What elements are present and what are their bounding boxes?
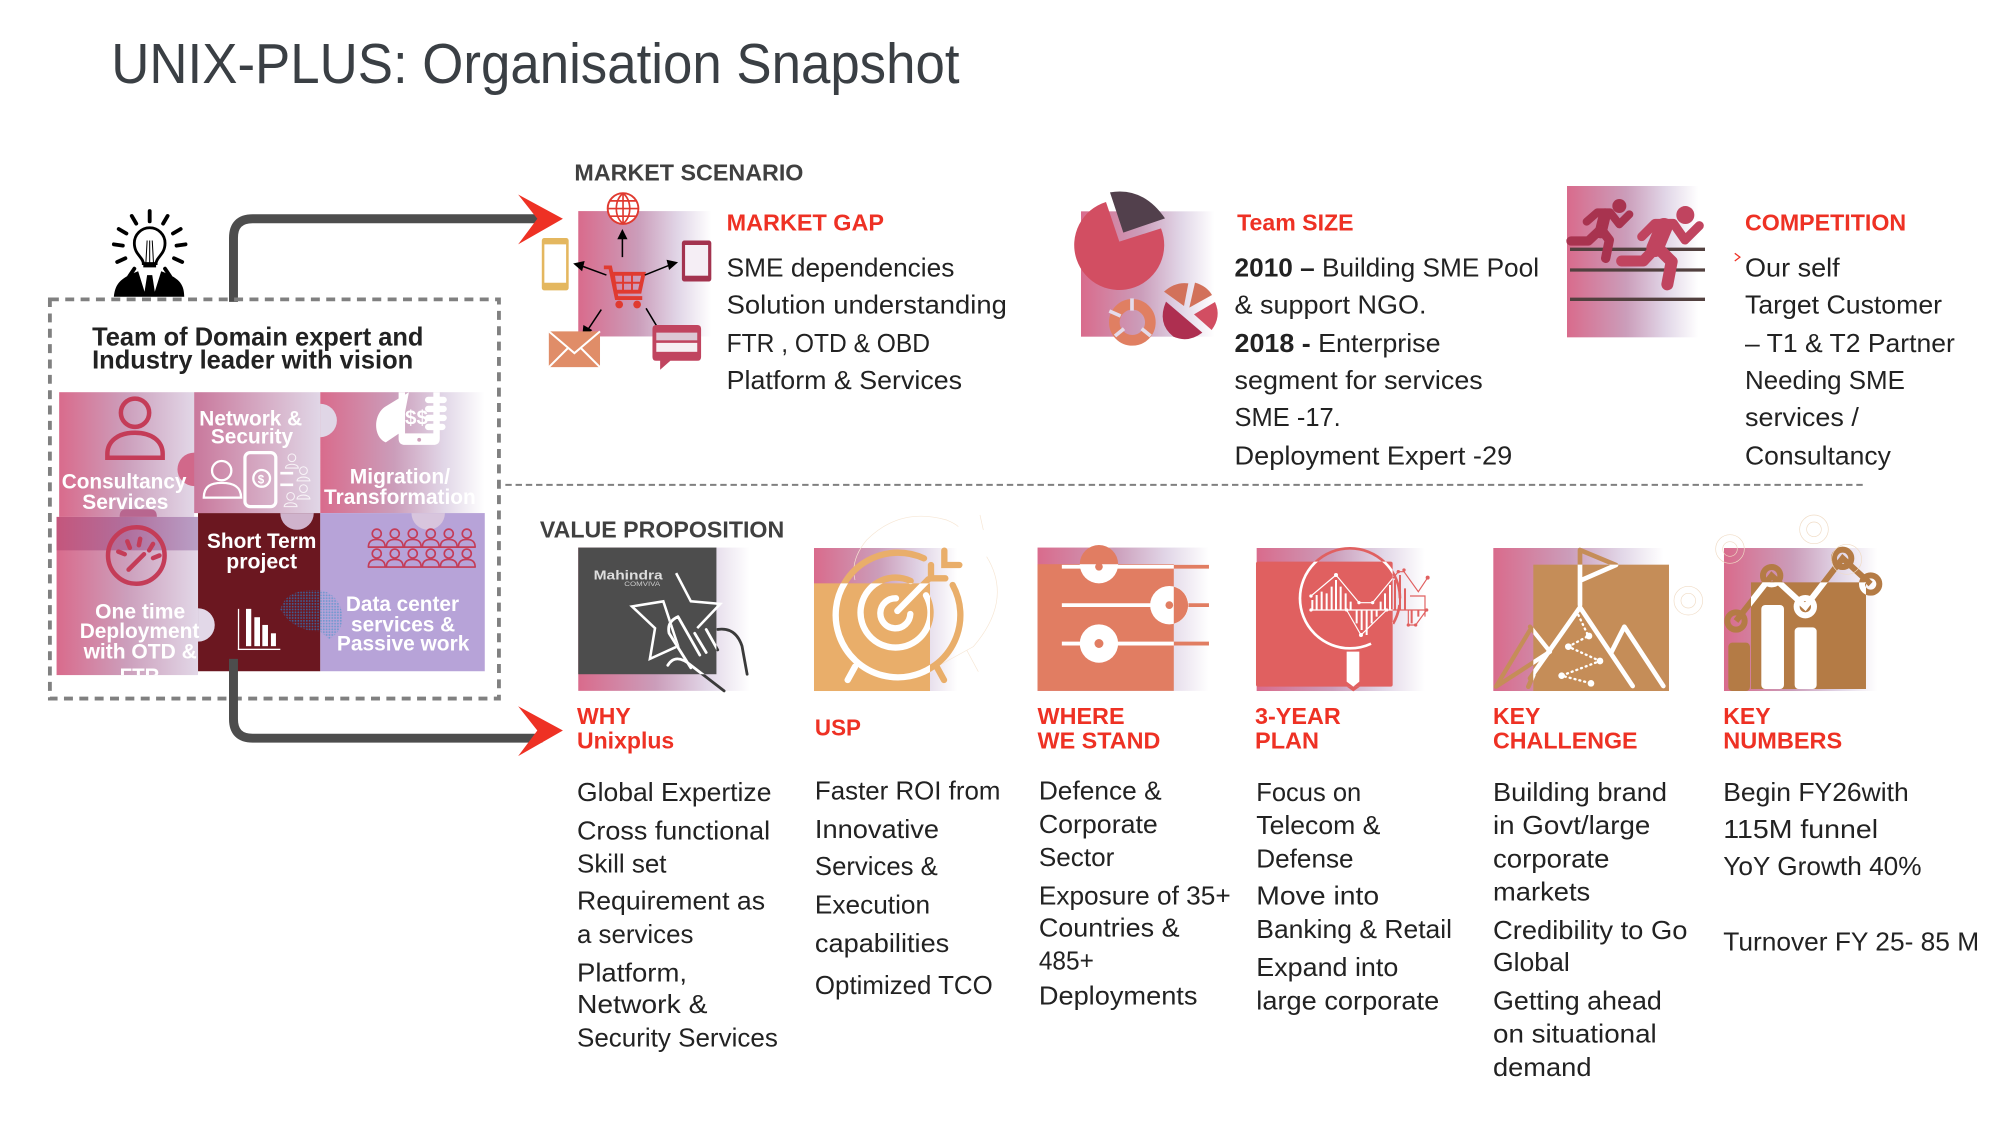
column: key numbers: [1716, 515, 1979, 957]
heading: 3-year plan: PLAN: [1255, 727, 1319, 753]
icon: star and hand: [578, 548, 750, 691]
heading: why unixplus: WHY: [577, 703, 631, 729]
puzzle tiles: [57, 392, 485, 688]
text: team size details: [1235, 252, 1539, 470]
puzzle tile: data center services: Passive work: [337, 633, 470, 656]
text: competition details: Target Customer: [1745, 289, 1942, 319]
column: why unixplus: [577, 548, 778, 1053]
icon: target: [814, 515, 997, 691]
puzzle tile: one time deployment: Deployment: [80, 620, 199, 643]
heading: key challenge: KEY: [1493, 703, 1540, 729]
text: usp list: Execution: [815, 889, 930, 919]
text: key numbers list: Turnover FY 25- 85 M: [1723, 927, 1979, 957]
text: why unixplus list: [577, 777, 778, 1053]
text: key numbers list: 115M funnel: [1723, 814, 1878, 844]
panel: competition: [1567, 186, 1955, 470]
puzzle tile: migration / transformation: $$: [405, 406, 428, 429]
arrow: leader to market scenario: [233, 194, 563, 302]
column: usp: [814, 515, 1000, 1000]
puzzle tile: migration / transformation: Migration/: [350, 465, 450, 488]
text: 3-year plan list: Banking & Retail: [1256, 914, 1452, 944]
text: key challenge list: corporate: [1493, 843, 1609, 873]
heading: competition: COMPETITION: [1745, 209, 1906, 235]
puzzle tile: consultancy services: Consultancy: [62, 471, 187, 494]
heading: usp: USP: [815, 715, 861, 741]
column: 3-year plan: [1255, 548, 1452, 1015]
text: usp list: Services &: [815, 851, 938, 881]
text: team size details: & support NGO.: [1235, 289, 1426, 319]
puzzle tile: short term project: [198, 513, 320, 671]
puzzle tile: short term project: project: [226, 550, 297, 573]
text: why unixplus list: Requirement as: [577, 886, 765, 916]
heading: team: [92, 323, 423, 374]
panel: team of domain experts: [50, 299, 499, 699]
text: competition details: Needing SME: [1745, 365, 1905, 395]
text: team size details: segment for services: [1235, 365, 1483, 395]
puzzle tile: network and security: [194, 392, 337, 530]
text: 3-year plan list: [1256, 777, 1452, 1015]
text: usp list: [815, 776, 1000, 1000]
panel: market gap: [542, 193, 1007, 395]
text: key challenge list: demand: [1493, 1052, 1591, 1082]
puzzle tile: migration / transformation: Transformation: [324, 486, 476, 509]
icon: star and hand: Mahindra: [594, 568, 664, 583]
puzzle tile: network and security: Security: [211, 426, 293, 449]
text: where we stand list: 485+: [1039, 946, 1094, 976]
text: key challenge list: markets: [1493, 877, 1590, 907]
text: market gap list: SME dependencies: [727, 252, 954, 282]
text: team size details: Deployment Expert -29: [1235, 440, 1512, 470]
text: key numbers list: YoY Growth 40%: [1723, 851, 1922, 881]
puzzle tile: data center services: Data center: [346, 593, 459, 616]
text: 3-year plan list: Focus on: [1256, 777, 1361, 807]
text: key numbers list: [1723, 777, 1979, 957]
icon: magnifier with waveform: [1256, 548, 1430, 691]
text: market gap list: [727, 252, 1007, 395]
text: team size details: SME -17.: [1235, 402, 1341, 432]
text: why unixplus list: a services: [577, 919, 693, 949]
icon: brain network: [280, 590, 342, 639]
icon: sliders: [1038, 545, 1209, 691]
text: why unixplus list: Cross functional: [577, 815, 770, 845]
puzzle tile: network and security: $: [258, 474, 265, 486]
text: key challenge list: Global: [1493, 947, 1570, 977]
heading: team: Team of Domain expert and: [92, 323, 423, 351]
puzzle tile: data center services: services &: [351, 613, 455, 636]
heading: key numbers: [1723, 703, 1842, 753]
text: why unixplus list: Security Services: [577, 1023, 778, 1053]
text: usp list: Innovative: [815, 814, 939, 844]
icon: leader with light bulb head: [114, 211, 186, 297]
text: key challenge list: Building brand: [1493, 777, 1667, 807]
heading: key numbers: KEY: [1723, 703, 1771, 729]
arrow: leader to value proposition: [233, 659, 563, 756]
text: 3-year plan list: Expand into: [1256, 952, 1398, 982]
text: competition details: services /: [1745, 402, 1860, 432]
text: market gap list: Platform & Services: [727, 365, 962, 395]
text: where we stand list: Defence &: [1039, 776, 1162, 806]
text: usp list: capabilities: [815, 928, 949, 958]
text: team size details: 2010 – Building SME Pool: [1235, 252, 1539, 282]
text: key challenge list: [1493, 777, 1687, 1082]
title: UNIX-PLUS: Organisation Snapshot: [111, 32, 960, 95]
puzzle tile: one time deployment: One time: [95, 601, 185, 624]
icon: pie charts: [1074, 191, 1218, 340]
text: 3-year plan list: large corporate: [1256, 985, 1439, 1015]
heading: team: Industry leader with vision: [92, 346, 413, 374]
text: 3-year plan list: Telecom &: [1256, 810, 1381, 840]
heading: market gap: MARKET GAP: [727, 209, 884, 235]
heading: market scenario: MARKET SCENARIO: [574, 159, 803, 185]
heading: where we stand: WE STAND: [1038, 727, 1160, 753]
text: why unixplus list: Skill set: [577, 849, 667, 879]
heading: 3-year plan: [1255, 703, 1341, 753]
heading: 3-year plan: 3-YEAR: [1255, 703, 1341, 729]
heading: key challenge: CHALLENGE: [1493, 727, 1638, 753]
text: 3-year plan list: Move into: [1256, 881, 1379, 911]
puzzle tile: one time deployment: FTR: [120, 665, 159, 688]
text: competition details: – T1 & T2 Partner: [1745, 328, 1955, 358]
text: market gap list: Solution understanding: [727, 289, 1007, 319]
text: where we stand list: Corporate: [1039, 809, 1158, 839]
heading: value proposition: VALUE PROPOSITION: [540, 516, 784, 542]
puzzle tile: consultancy services: [59, 392, 211, 517]
text: where we stand list: Sector: [1039, 842, 1115, 872]
icon: mountain and flag: [1493, 548, 1703, 691]
column: where we stand: [1038, 545, 1231, 1010]
text: where we stand list: [1039, 776, 1231, 1010]
puzzle tile: consultancy services: Services: [82, 491, 168, 514]
text: competition details: [1735, 252, 1955, 470]
icon: shopping cart hub: [542, 193, 711, 370]
heading: key numbers: NUMBERS: [1723, 727, 1842, 753]
text: why unixplus list: Platform,: [577, 957, 687, 987]
text: where we stand list: Exposure of 35+: [1039, 881, 1231, 911]
puzzle tile: one time deployment: [57, 509, 215, 688]
heading: why unixplus: [577, 703, 674, 753]
column: key challenge: [1493, 548, 1703, 1082]
puzzle tile: data center services: [320, 513, 485, 671]
text: team size details: 2018 - Enterprise: [1235, 328, 1441, 358]
text: why unixplus list: Global Expertize: [577, 777, 771, 807]
text: competition details: Consultancy: [1745, 440, 1892, 470]
puzzle tile: one time deployment: with OTD &: [83, 640, 197, 663]
text: key challenge list: Getting ahead: [1493, 985, 1662, 1015]
text: where we stand list: Countries &: [1039, 912, 1180, 942]
icon: runners: [1567, 186, 1705, 337]
text: usp list: Faster ROI from: [815, 776, 1000, 806]
heading: team size: Team SIZE: [1237, 209, 1354, 235]
heading: key challenge: [1493, 703, 1638, 753]
text: 3-year plan list: Defense: [1256, 843, 1354, 873]
puzzle tile: short term project: Short Term: [207, 530, 316, 553]
heading: why unixplus: Unixplus: [577, 727, 674, 753]
heading: where we stand: [1038, 703, 1160, 753]
puzzle tile: migration / transformation: [320, 392, 485, 513]
icon: bar chart: [238, 609, 280, 650]
panel: team size: [1074, 191, 1539, 470]
puzzle tile: network and security: Network &: [199, 408, 302, 431]
text: key numbers list: Begin FY26with: [1723, 777, 1909, 807]
text: where we stand list: Deployments: [1039, 980, 1197, 1010]
text: key challenge list: on situational: [1493, 1019, 1657, 1049]
text: usp list: Optimized TCO: [815, 970, 993, 1000]
dashed frame: [50, 299, 499, 699]
text: competition details: Our self: [1745, 252, 1840, 282]
text: key challenge list: in Govt/large: [1493, 810, 1650, 840]
text: why unixplus list: Network &: [577, 989, 708, 1019]
icon: rising bar and line chart: [1716, 515, 1879, 691]
text: key challenge list: Credibility to Go: [1493, 915, 1687, 945]
icon: star and hand: COMVIVA: [624, 581, 661, 588]
text: market gap list: FTR , OTD & OBD: [727, 328, 930, 358]
heading: where we stand: WHERE: [1038, 703, 1125, 729]
